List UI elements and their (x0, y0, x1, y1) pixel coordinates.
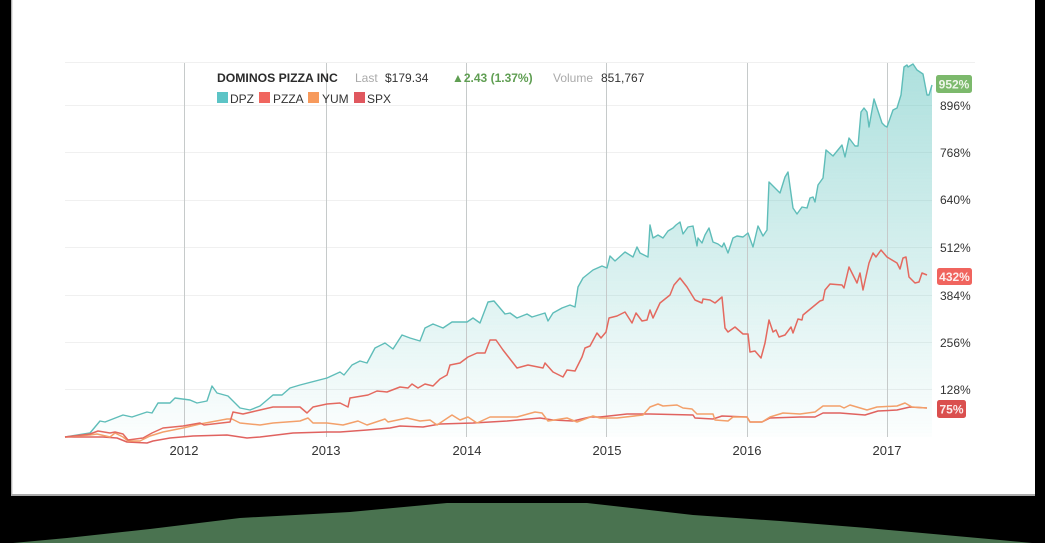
legend: SPX (367, 92, 391, 106)
badge: SPX 75% (937, 400, 966, 418)
x axis year labels (170, 443, 901, 458)
legend (217, 92, 391, 106)
header: company quote: 851,767 (601, 71, 645, 85)
y axis labels: 384% (940, 289, 971, 303)
area: DPZ fill (65, 64, 932, 437)
legend: PZZA (273, 92, 304, 106)
header: company quote: Volume (553, 71, 593, 85)
y axis labels: 256% (940, 336, 971, 350)
badge: SPX 75%: 75% (939, 402, 964, 416)
y axis labels (940, 99, 971, 397)
legend: DPZ (230, 92, 254, 106)
badge: DPZ 952% (936, 75, 972, 93)
header: company quote: $179.34 (385, 71, 429, 85)
y axis labels: 768% (940, 146, 971, 160)
x axis year labels: 2013 (312, 443, 340, 458)
y axis labels: 896% (940, 99, 971, 113)
header: company quote (217, 71, 645, 85)
header: company quote: ▲2.43 (1.37%) (452, 71, 533, 85)
year gridlines (184, 63, 888, 437)
x axis year labels: 2012 (170, 443, 198, 458)
x axis year labels: 2017 (873, 443, 901, 458)
y axis labels: 512% (940, 241, 971, 255)
x axis year labels: 2015 (593, 443, 621, 458)
line: PZZA (65, 250, 927, 440)
badge: DPZ 952%: 952% (939, 78, 970, 92)
line: DPZ (65, 64, 932, 437)
y axis labels: 128% (940, 383, 971, 397)
stock chart (65, 62, 975, 443)
badge: PZZA 432%: 432% (939, 270, 970, 284)
legend: YUM (322, 92, 349, 106)
header: company quote: DOMINOS PIZZA INC (217, 71, 338, 85)
x axis year labels: 2014 (453, 443, 481, 458)
line: SPX (65, 407, 927, 443)
line: YUM (65, 403, 927, 441)
x axis year labels: 2016 (733, 443, 761, 458)
y axis labels: 640% (940, 193, 971, 207)
header: company quote: Last (355, 71, 378, 85)
